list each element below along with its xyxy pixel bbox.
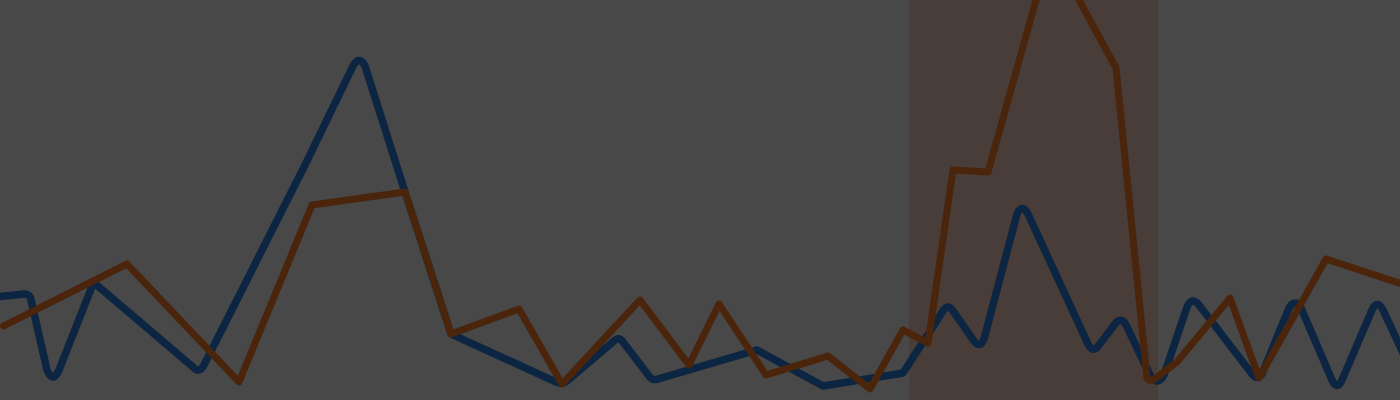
highlighted band: [909, 0, 1158, 400]
